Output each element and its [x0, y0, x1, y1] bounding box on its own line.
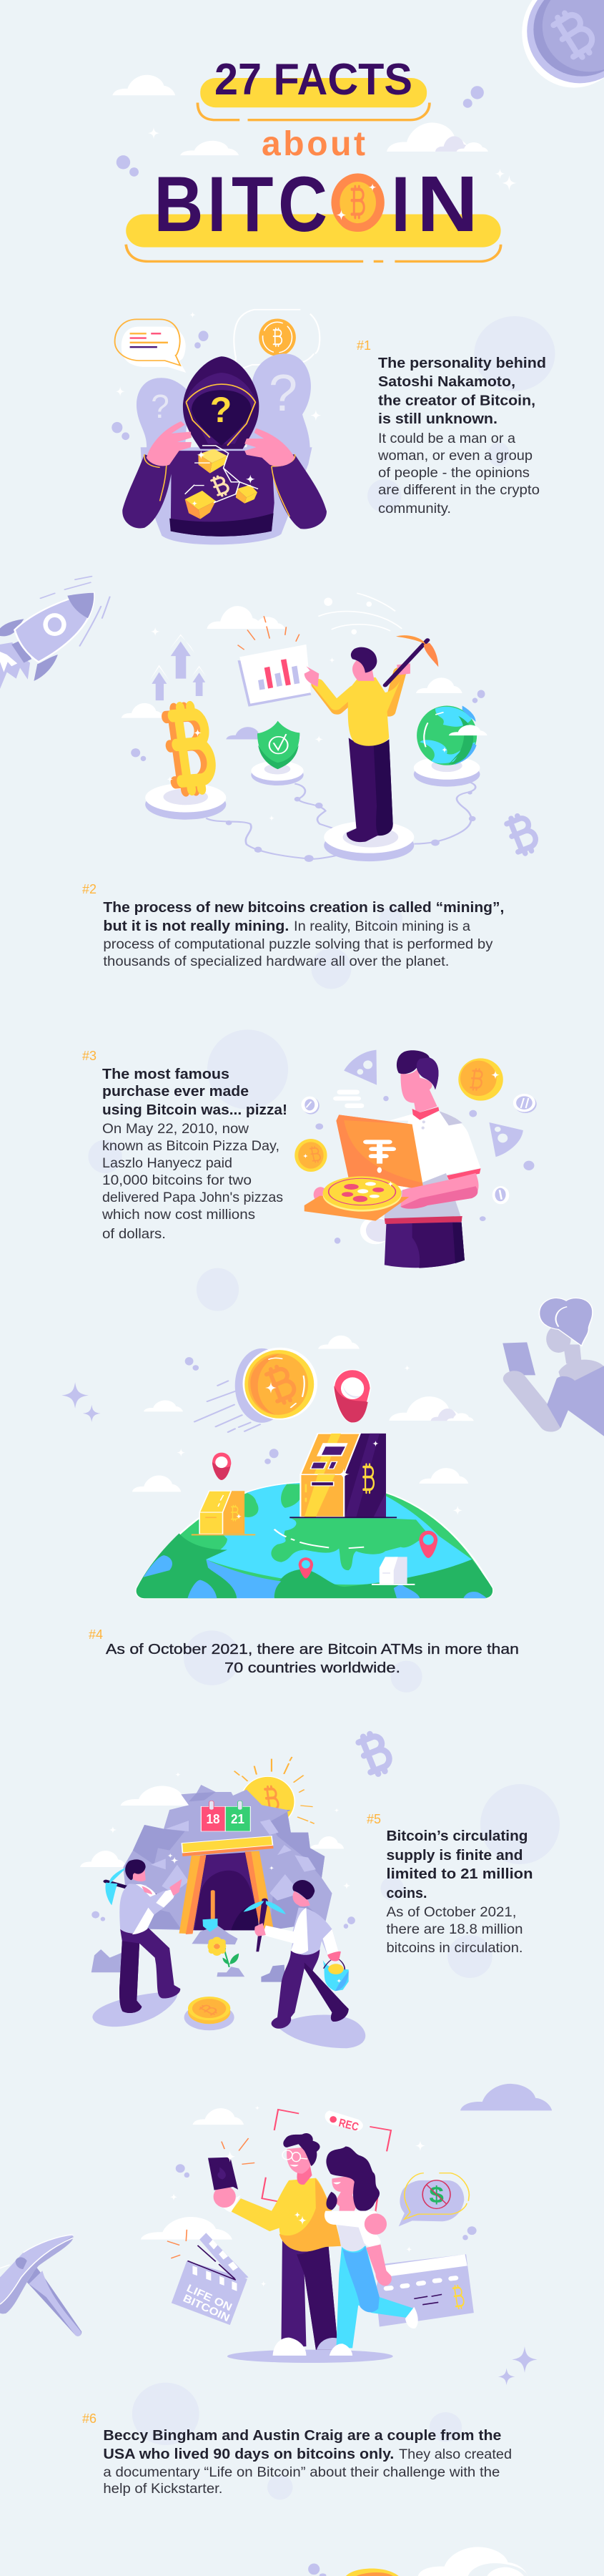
title: 27 facts: 27 FACTS: [214, 55, 412, 104]
fact 5 text: supply is finite and: [386, 1847, 523, 1864]
fact 3 text: On May 22, 2010, now: [102, 1122, 249, 1137]
calendar: [201, 1801, 250, 1831]
background circles: [311, 907, 402, 989]
dots around hacker: [112, 330, 209, 440]
fact 4 text: As of October 2021, there are Bitcoin ATMs in more than: [106, 1641, 519, 1657]
section 6: couple illustration: [0, 2084, 552, 2576]
section 3: pizza illustration: [88, 1029, 537, 1311]
bottom dots: [308, 2564, 326, 2576]
dots and sparkles: [117, 86, 517, 191]
sparkles: [61, 1382, 101, 1422]
pin: large: [334, 1370, 370, 1423]
coin behind person: [360, 1217, 393, 1244]
clapperboard label: LIFE ON: [184, 2282, 234, 2313]
section 2: mining illustration: [0, 577, 487, 989]
fact 6 text: [82, 2411, 512, 2497]
clouds: [141, 2084, 552, 2240]
person shirt: [385, 1111, 481, 1224]
fact 3 text: 10,000 bitcoins for two: [102, 1173, 252, 1188]
clouds: [80, 1786, 344, 1867]
credit card: [375, 2254, 474, 2326]
background circles: [380, 1784, 560, 1978]
miner left: [105, 1859, 182, 2013]
fact 4 text: 70 countries worldwide.: [224, 1660, 400, 1676]
fact 1 text: are different in the crypto: [378, 483, 540, 498]
title: bitcoin: [154, 160, 478, 248]
bucket sparkle: [336, 1979, 342, 1983]
fact 1 text: woman, or even a group: [377, 449, 533, 464]
icon: bitcoin symbol: [165, 706, 214, 791]
fact 6 text: help of Kickstarter.: [103, 2482, 222, 2497]
background circles: [184, 1630, 422, 1693]
cable nodes: [226, 791, 476, 862]
fact 5 text: there are 18.8 million: [386, 1922, 523, 1937]
speed lines: [194, 1381, 260, 1432]
fact 2 text: but it is not really mining.: [103, 918, 289, 934]
bottom coin peek: [346, 2568, 399, 2576]
fact 1 text: Satoshi Nakamoto,: [378, 373, 515, 390]
dots: [91, 1911, 355, 1929]
icon: bitcoin symbol small: [505, 813, 540, 856]
white ATM on globe: [372, 1557, 415, 1585]
fact 6 text: a documentary “Life on Bitcoin” about their challenge with the: [103, 2465, 500, 2480]
title banner: top: [197, 78, 430, 120]
section 1: header and hacker illustration: [112, 0, 604, 512]
title: about: about: [262, 125, 365, 163]
icon: corner coin: [522, 0, 604, 88]
woman: [325, 2146, 418, 2356]
question marks: ?: [210, 390, 232, 430]
icon: flying coin: [235, 1348, 317, 1423]
fact 3 text: The most famous: [102, 1066, 229, 1082]
background circles: [132, 2383, 462, 2499]
fact 3 text: known as Bitcoin Pizza Day,: [102, 1139, 279, 1154]
fact 5 text: coins.: [386, 1885, 427, 1901]
mine entrance: [179, 1836, 274, 1934]
woman silhouette: [502, 1298, 604, 1436]
bottom cloud peek: [418, 2547, 528, 2576]
bubble: message: [115, 319, 186, 373]
platform: shield: [251, 761, 304, 785]
icon: flying coin bitcoin mark: [265, 1363, 298, 1405]
pizza slices: [344, 1050, 523, 1157]
calendar numbers: 18: [206, 1812, 220, 1826]
fact 6 text: #6: [82, 2411, 96, 2426]
person with pickaxe: [305, 635, 438, 842]
small coins: [301, 1094, 537, 1204]
chart card: [238, 616, 311, 707]
sparkles and white arcs: [151, 593, 402, 821]
background circles: [367, 316, 555, 512]
fact 1 text: community.: [378, 501, 451, 516]
fact 3 text: [82, 1049, 287, 1242]
mountain: [109, 1772, 350, 1930]
hacker body: [122, 356, 327, 537]
fact 4 text: #4: [89, 1627, 103, 1642]
pins on globe: [299, 1531, 437, 1579]
sun coin with rays: [234, 1757, 315, 1826]
fact 5 text: bitcoins in circulation.: [386, 1941, 523, 1956]
fact 2 text: #2: [82, 882, 96, 896]
camera frame brackets: [262, 2110, 391, 2219]
hacker shadow blobs: [137, 353, 312, 544]
fact 2 text: The process of new bitcoins creation is called “mining”,: [103, 899, 504, 916]
question marks: ?: [151, 388, 169, 425]
rec label: REC: [337, 2117, 360, 2134]
fact 2 text: [82, 882, 504, 969]
fact 6 text: Beccy Bingham and Austin Craig are a couple from the: [103, 2427, 501, 2444]
dots: [131, 690, 485, 761]
person shorts: [385, 1222, 465, 1268]
icon: bitcoin symbol: [357, 1730, 393, 1776]
connecting cables: [206, 782, 475, 859]
fact 6 text: They also created: [399, 2447, 512, 2462]
fact 1 text: #1: [357, 338, 371, 353]
bubble: coin: [234, 310, 320, 371]
clapperboard label: BITCOIN: [181, 2292, 232, 2324]
large ATM: [289, 1434, 397, 1517]
fact 5 text: As of October 2021,: [386, 1905, 516, 1920]
pizza box base: [305, 1196, 409, 1221]
platform: bitcoin: [145, 783, 226, 820]
platform: person: [324, 821, 414, 861]
question marks: [151, 365, 297, 430]
bubble: no dollars: [399, 2173, 469, 2226]
bitcoin coin letter base: [331, 173, 385, 232]
fact 3 text: purchase ever made: [102, 1083, 249, 1100]
fact 3 text: using Bitcoin was... pizza!: [102, 1102, 287, 1118]
clapperboard label: [181, 2282, 234, 2324]
title: bitcoin: I: [391, 160, 410, 248]
fact 5 text: Bitcoin’s circulating: [386, 1828, 528, 1844]
fact 5 text: limited to 21 million: [386, 1866, 533, 1882]
fact 1 text: [357, 338, 546, 516]
fact 3 text: which now cost millions: [102, 1208, 255, 1223]
growth arrows: [149, 635, 206, 700]
icon: blockchain cubes: [185, 446, 258, 519]
fact 1 text: The personality behind: [378, 355, 546, 371]
calendar numbers: 21: [231, 1812, 244, 1826]
person head: [397, 1050, 439, 1120]
title: bitcoin: O: [331, 160, 385, 248]
fact 5 text: [367, 1812, 533, 1956]
clapperboard: [167, 2230, 249, 2325]
rec badge: [325, 2110, 363, 2131]
dots and sparkles: [170, 2105, 538, 2385]
fact 2 text: process of computational puzzle solving that is performed by: [103, 937, 493, 952]
question marks: ?: [269, 365, 297, 422]
dots: [315, 1096, 534, 1244]
fact 1 text: is still unknown.: [378, 411, 497, 427]
rock, shovel and flower: [91, 1890, 285, 1982]
section 5: mine illustration: [80, 1757, 560, 2048]
fact 1 text: It could be a man or a: [378, 431, 515, 446]
fact 3 text: of dollars.: [102, 1227, 166, 1242]
background circles: [88, 1029, 288, 1311]
icon: security shield: [257, 721, 299, 769]
clouds: [132, 1336, 474, 1492]
title banner: bottom: [126, 215, 501, 261]
fact 4 text: [89, 1627, 519, 1676]
coins: [294, 1058, 503, 1172]
title: bitcoin: BITC: [154, 160, 327, 248]
ground shadow: [227, 2350, 393, 2363]
man: [208, 2133, 341, 2356]
fact 3 text: Laszlo Hanyecz paid: [102, 1156, 232, 1171]
icon: gold coin on ground: [188, 1997, 230, 2024]
fact 5 text: #5: [367, 1812, 381, 1826]
miner right: [244, 1880, 349, 2029]
fact 3 text: delivered Papa John's pizzas: [102, 1190, 283, 1205]
calendar numbers: [206, 1812, 244, 1826]
pin: small: [212, 1453, 231, 1480]
icon: corner coin bitcoin mark: [551, 7, 598, 61]
small ATM: [192, 1491, 259, 1534]
pizza logo mark: [333, 1089, 364, 1108]
icon: rocket: [0, 577, 110, 689]
fact 3 text: #3: [82, 1049, 96, 1063]
fact 2 text: In reality, Bitcoin mining is a: [294, 919, 470, 934]
clouds: [122, 606, 462, 739]
icon: coin centre of the letter O: [336, 182, 377, 223]
sparkles around hacker: [116, 312, 321, 431]
icon: globe: [417, 706, 487, 765]
fact 1 text: of people - the opinions: [378, 466, 530, 481]
ground shadows: [92, 1992, 365, 2048]
fact 1 text: the creator of Bitcoin,: [378, 392, 535, 409]
platform: globe: [414, 756, 480, 787]
fact 2 text: thousands of specialized hardware all over the planet.: [103, 954, 449, 969]
title: bitcoin: N: [417, 160, 478, 248]
clouds: [112, 75, 488, 155]
pizza box lid: [336, 1115, 424, 1190]
hand and arm: [314, 1173, 479, 1209]
hacker hands: [147, 421, 294, 466]
fact 6 text: USA who lived 90 days on bitcoins only.: [103, 2446, 394, 2462]
section 4: ATM illustration: [61, 1298, 604, 1693]
icon: pickaxe: [0, 2235, 81, 2336]
pizza: [323, 1176, 402, 1212]
dots and sparkles: [177, 1357, 462, 1515]
bubble: no dollars: $: [429, 2183, 444, 2208]
globe dome: [137, 1482, 492, 1598]
